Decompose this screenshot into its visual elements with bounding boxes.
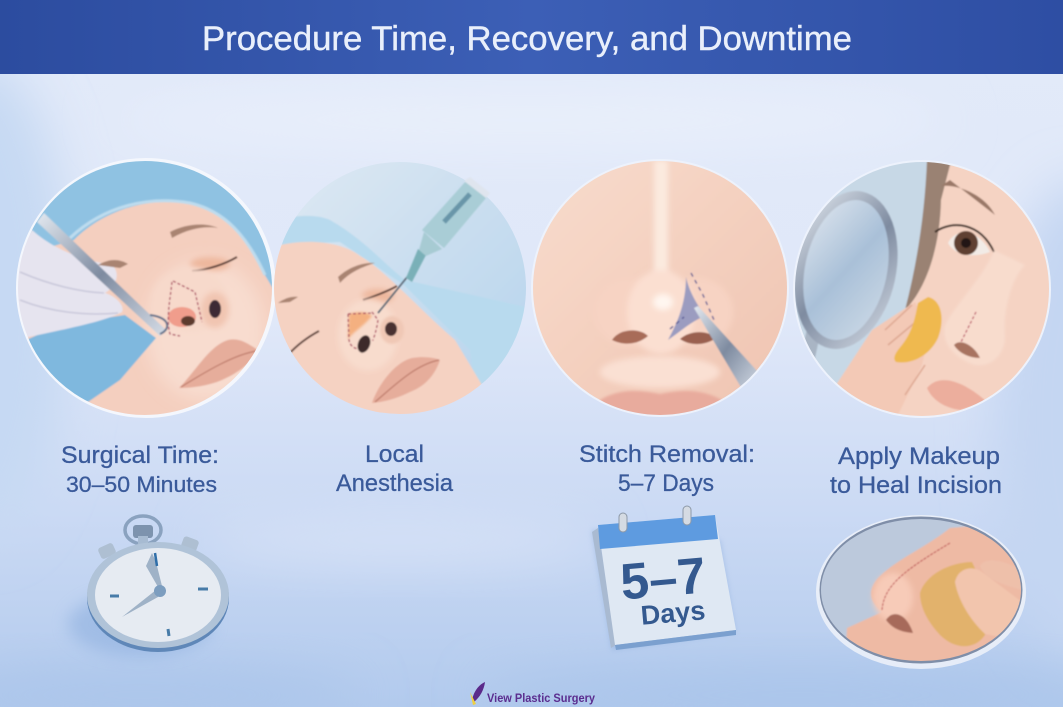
label: apply makeup [830,443,1002,499]
sponge [894,297,942,363]
panel: surgical photo [15,158,280,418]
label: local anesthesia [336,441,454,497]
label: local anesthesia: Anesthesia [336,470,454,497]
label: apply makeup: to Heal Incision [830,472,1002,499]
label: stitch removal: Stitch Removal: [579,441,755,468]
icon: stopwatch [68,516,229,656]
drape [15,315,156,402]
hand [836,303,924,414]
nose wings and tip [594,278,666,346]
finger [954,568,1020,636]
syringe [378,177,490,313]
label: stitch removal [579,441,755,497]
lips [372,357,440,403]
incision and dashes [668,278,700,340]
logo: View Plastic Surgery [470,682,595,705]
nose with nostrils [191,266,210,273]
brows and closed eyes [338,263,375,283]
title banner: Procedure Time, Recovery, and Downtime [202,20,852,58]
face [898,165,1049,416]
icon: calendar: 5–7 [618,546,708,611]
panel: local anesthesia photo [270,160,532,420]
upper lip shading and lips [600,356,720,388]
label: apply makeup: Apply Makeup [838,443,1000,470]
tweezers [694,306,758,394]
nose [944,250,1025,365]
left brow [98,260,128,268]
surgical cap [31,161,272,288]
sponge [920,562,990,646]
glove [15,230,123,340]
panel: stitch removal photo [530,159,792,420]
icon: calendar [592,506,736,650]
label: local anesthesia: Local [365,441,424,468]
panel: makeup application photo [772,160,1052,422]
mirror [795,190,898,358]
label: surgical time: Surgical Time: [61,442,219,469]
hair [905,162,952,308]
face shading [145,260,265,400]
label: surgical time: 30–50 Minutes [66,472,217,497]
right brow and eye [170,225,218,238]
nose [338,299,398,371]
lips [927,380,987,410]
label: stitch removal: 5–7 Days [618,470,714,497]
eye [935,225,994,255]
forceps [37,213,166,336]
title banner [0,0,1063,74]
icon: oval nose close-up [815,515,1030,669]
lips [179,339,258,388]
label: surgical time [61,442,219,497]
nostrils [612,330,648,344]
face [270,242,482,420]
logo: View Plastic Surgery: View Plastic Surgery [487,691,595,705]
surgical cap [282,216,490,334]
icon: calendar: Days [640,595,706,631]
skin profile [846,526,1021,661]
